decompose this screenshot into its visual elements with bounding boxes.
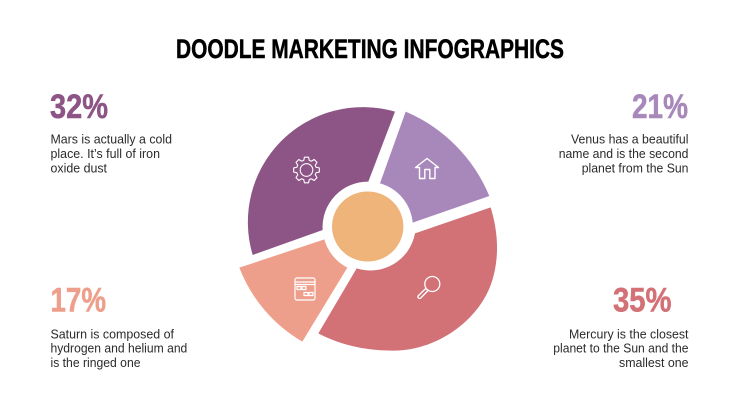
text block: Venus 21%: 21%: [632, 88, 688, 126]
text block: Venus 21%: Venus has a beautiful: [571, 132, 688, 146]
text block: Saturn 17%: hydrogen and helium and: [50, 342, 187, 356]
icon: browser window: [295, 278, 315, 300]
segment: purple: [248, 107, 395, 255]
icon: gear: [294, 157, 319, 183]
text block: Saturn 17%: 17%: [50, 282, 106, 320]
text block: Venus 21%: [559, 88, 689, 176]
text block: Mercury 35%: 35%: [613, 282, 672, 320]
text block: Mars 32%: oxide dust: [50, 162, 108, 176]
text block: Mars 32%: Mars is actually a cold: [50, 132, 172, 146]
text block: Venus 21%: planet from the Sun: [582, 162, 689, 176]
icon: magnifier: [418, 276, 440, 298]
text block: Mars 32%: 32%: [50, 88, 108, 126]
text block: Saturn 17%: [50, 282, 187, 370]
center circle: [332, 192, 403, 262]
text block: Saturn 17%: is the ringed one: [50, 356, 141, 370]
text block: Saturn 17%: Saturn is composed of: [50, 327, 175, 341]
text block: Mars 32%: [50, 88, 172, 176]
pie chart: [239, 107, 497, 351]
text block: Mercury 35%: [553, 282, 689, 370]
segment: lilac: [380, 112, 489, 223]
text block: Mercury 35%: smallest one: [619, 356, 689, 370]
title: DOODLE MARKETING INFOGRAPHICS: [176, 34, 564, 64]
text block: Mercury 35%: planet to the Sun and the: [553, 342, 689, 356]
text block: Mars 32%: place. It’s full of iron: [50, 147, 160, 161]
segment: red: [318, 207, 497, 351]
text block: Venus 21%: name and is the second: [559, 147, 689, 161]
icon: house: [416, 158, 438, 178]
segment: salmon: [239, 239, 347, 342]
text block: Mercury 35%: Mercury is the closest: [569, 327, 689, 341]
